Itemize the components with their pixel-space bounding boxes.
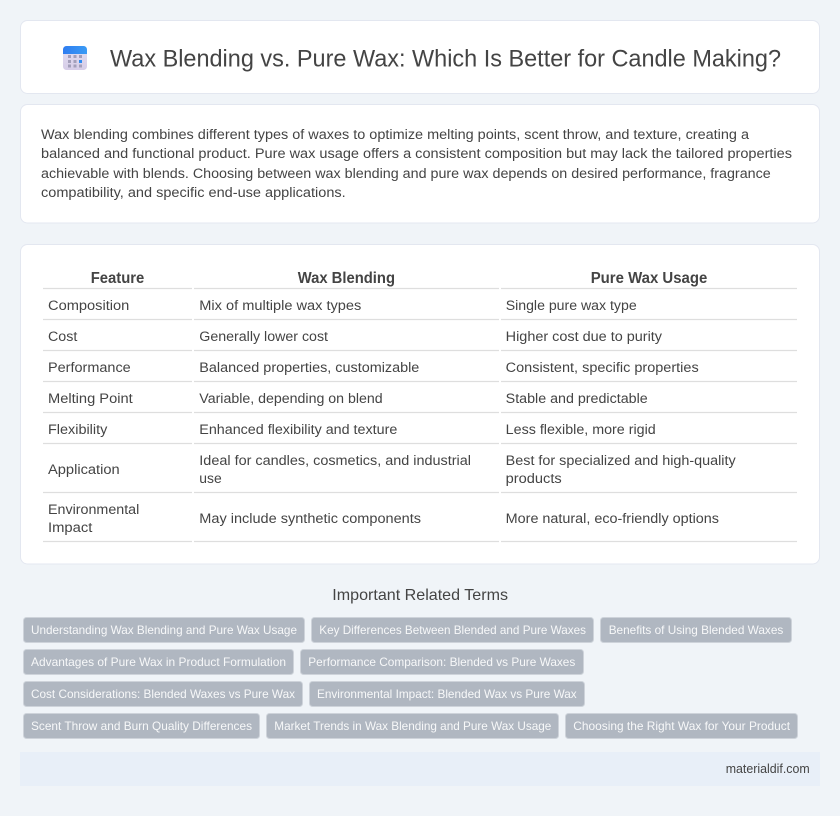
row: melting point: Melting Point bbox=[48, 391, 133, 407]
row: flexibility: Enhanced flexibility and texture bbox=[199, 422, 397, 438]
table header: Feature bbox=[91, 270, 144, 287]
row: cost: Generally lower cost bbox=[199, 329, 328, 345]
row: performance: Performance bbox=[48, 360, 131, 376]
row: application: Best for specialized and high-quality bbox=[506, 453, 737, 469]
tag: Scent Throw and Burn Quality Differences bbox=[31, 719, 252, 733]
table header: Pure Wax Usage bbox=[591, 270, 707, 287]
row: flexibility: Flexibility bbox=[48, 422, 108, 438]
row: composition: Composition bbox=[48, 298, 129, 314]
tag: Choosing the Right Wax for Your Product bbox=[573, 719, 791, 733]
tag bbox=[600, 618, 792, 642]
row: cost bbox=[48, 329, 663, 345]
row: environmental impact bbox=[48, 502, 719, 536]
row: flexibility bbox=[48, 422, 656, 438]
tag: Advantages of Pure Wax in Product Formulation bbox=[31, 655, 286, 669]
row: cost: Higher cost due to purity bbox=[506, 329, 663, 345]
row: flexibility: Less flexible, more rigid bbox=[506, 422, 656, 438]
footer bbox=[20, 752, 820, 786]
row: environmental impact: Impact bbox=[48, 520, 92, 536]
text block: description: compatibility, and specific end-use applications. bbox=[41, 185, 346, 201]
row: application: Ideal for candles, cosmetics, and industrial bbox=[199, 453, 471, 469]
tag: Benefits of Using Blended Waxes bbox=[609, 623, 783, 637]
row: cost: Cost bbox=[48, 329, 77, 345]
row: melting point bbox=[48, 391, 648, 407]
tag: Performance Comparison: Blended vs Pure Waxes bbox=[308, 655, 575, 669]
tag bbox=[566, 714, 798, 738]
row: environmental impact: Environmental bbox=[48, 502, 139, 518]
row: performance: Balanced properties, customizable bbox=[199, 360, 419, 376]
text block: description bbox=[41, 127, 792, 201]
tag: Key Differences Between Blended and Pure Waxes bbox=[319, 623, 586, 637]
tag bbox=[24, 650, 294, 674]
footer source: materialdif.com bbox=[726, 761, 810, 776]
panel: header bbox=[20, 20, 820, 94]
row: performance bbox=[48, 360, 699, 376]
text block: description: Wax blending combines different types of waxes to optimize melting points, scent throw, and texture, creating a bbox=[41, 127, 749, 143]
title: Wax Blending vs. Pure Wax: Which Is Better for Candle Making? bbox=[110, 46, 781, 72]
tag bbox=[312, 618, 594, 642]
row: composition: Mix of multiple wax types bbox=[199, 298, 361, 314]
tag bbox=[24, 618, 304, 642]
row: composition bbox=[48, 298, 637, 314]
heading: important related terms: Important Related Terms bbox=[332, 587, 508, 604]
panel: related term tags bbox=[24, 618, 798, 738]
tag bbox=[24, 682, 302, 706]
table header: Wax Blending bbox=[298, 270, 395, 287]
tag: Understanding Wax Blending and Pure Wax Usage bbox=[31, 623, 297, 637]
panel: comparison table bbox=[20, 244, 820, 564]
tag: Market Trends in Wax Blending and Pure Wax Usage bbox=[274, 719, 552, 733]
row: performance: Consistent, specific properties bbox=[506, 360, 699, 376]
tag bbox=[310, 682, 584, 706]
tag: Environmental Impact: Blended Wax vs Pure Wax bbox=[317, 687, 577, 701]
row: application: Application bbox=[48, 462, 120, 478]
row: composition: Single pure wax type bbox=[506, 298, 637, 314]
table header bbox=[91, 270, 707, 287]
tag: Cost Considerations: Blended Waxes vs Pure Wax bbox=[31, 687, 295, 701]
tag bbox=[300, 650, 584, 674]
row: melting point: Variable, depending on blend bbox=[199, 391, 383, 407]
icon: calendar bbox=[63, 46, 87, 70]
tag bbox=[266, 714, 558, 738]
text block: description: balanced and functional product. Pure wax usage offers a consistent composition but may lack the tailored properties bbox=[41, 146, 792, 162]
row: application: products bbox=[506, 471, 562, 487]
panel: description bbox=[20, 104, 820, 223]
text block: description: achievable with blends. Choosing between wax blending and pure wax depends on desired performance, fragrance bbox=[41, 166, 771, 182]
row: application: use bbox=[199, 471, 222, 487]
row: melting point: Stable and predictable bbox=[506, 391, 648, 407]
row: environmental impact: May include synthetic components bbox=[199, 511, 421, 527]
row: application bbox=[48, 453, 737, 487]
row: environmental impact: More natural, eco-friendly options bbox=[506, 511, 719, 527]
tag bbox=[24, 714, 260, 738]
